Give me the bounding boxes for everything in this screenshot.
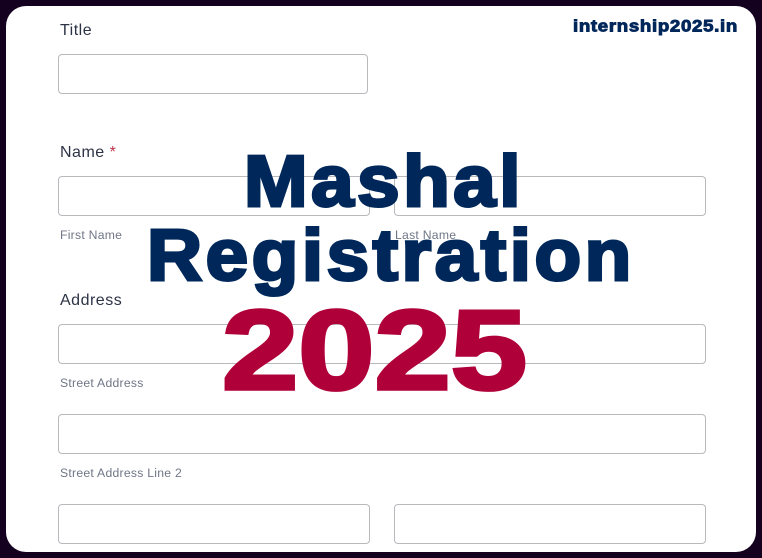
input: first name field xyxy=(58,176,370,216)
title: 2025: 2025 xyxy=(222,287,527,413)
heading: Name label: Name * xyxy=(60,144,116,161)
text: street address line 2 caption: Street Address Line 2 xyxy=(60,466,182,480)
input: last name field xyxy=(394,176,706,216)
text: first name caption: First Name xyxy=(60,228,122,242)
heading: Title label: Title xyxy=(60,22,92,39)
input: street address field xyxy=(58,324,706,364)
text: website name: internship2025.in xyxy=(573,16,738,35)
input: city field xyxy=(58,504,370,544)
title: Mashal: Mashal xyxy=(244,141,524,222)
input: state field xyxy=(394,504,706,544)
input: street address line 2 field xyxy=(58,414,706,454)
input: title field xyxy=(58,54,368,94)
heading: Address label: Address xyxy=(60,292,122,309)
text: street address caption: Street Address xyxy=(60,376,144,390)
title: Registration: Registration xyxy=(147,215,635,296)
text: last name caption: Last Name xyxy=(395,228,456,242)
